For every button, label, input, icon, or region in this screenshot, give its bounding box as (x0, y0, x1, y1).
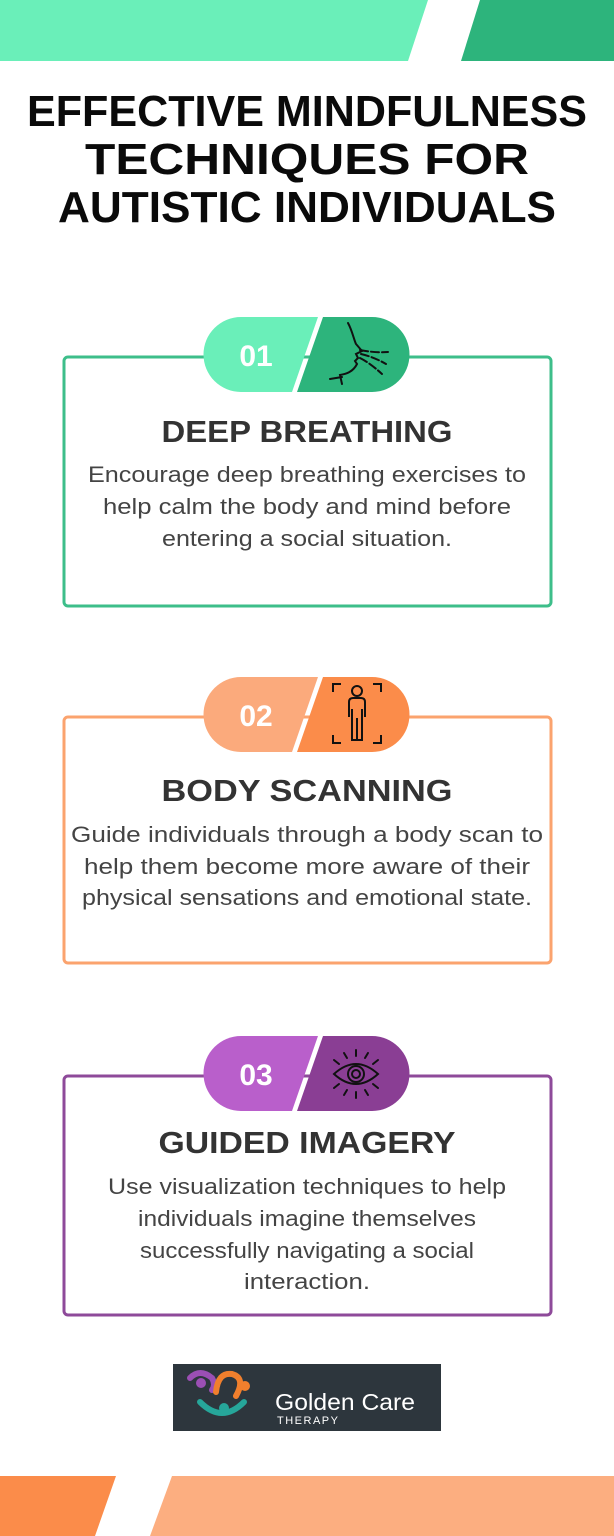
panel: body scanning (64, 677, 551, 963)
body text: Encourage deep breathing exercises to (88, 462, 526, 487)
title: EFFECTIVE MINDFULNESS (27, 87, 587, 136)
body text: interaction. (244, 1269, 370, 1294)
badge 03 (204, 1036, 410, 1111)
body text: help them become more aware of their (84, 854, 530, 879)
body text: entering a social situation. (162, 526, 452, 551)
panel: guided imagery (64, 1036, 551, 1315)
icon: breathing face (330, 323, 388, 384)
panel: deep breathing (64, 317, 551, 606)
bottom band (0, 1476, 614, 1536)
heading: DEEP BREATHING (162, 414, 452, 449)
logo (173, 1364, 441, 1431)
icon: eye (334, 1050, 378, 1098)
heading: GUIDED IMAGERY (158, 1125, 456, 1160)
body text (108, 1174, 506, 1294)
title: AUTISTIC INDIVIDUALS (58, 183, 556, 232)
logo: Golden Care (275, 1389, 415, 1415)
body text: successfully navigating a social (140, 1238, 474, 1263)
heading: BODY SCANNING (162, 773, 452, 808)
logo: THERAPY (277, 1415, 339, 1427)
body text: individuals imagine themselves (138, 1206, 476, 1231)
body text: Use visualization techniques to help (108, 1174, 506, 1199)
badge 02 (204, 677, 410, 752)
icon: body scan (333, 684, 381, 743)
title: TECHNIQUES FOR (85, 135, 529, 184)
body text: physical sensations and emotional state. (82, 885, 532, 910)
body text (88, 462, 526, 551)
badge 01: 01 (239, 340, 273, 373)
body text: help calm the body and mind before (103, 494, 511, 519)
badge 03: 03 (239, 1059, 273, 1092)
body text: Guide individuals through a body scan to (71, 822, 543, 847)
badge 02: 02 (239, 700, 273, 733)
badge 01 (204, 317, 410, 392)
title (27, 87, 587, 232)
body text (71, 822, 543, 910)
top band (0, 0, 614, 61)
